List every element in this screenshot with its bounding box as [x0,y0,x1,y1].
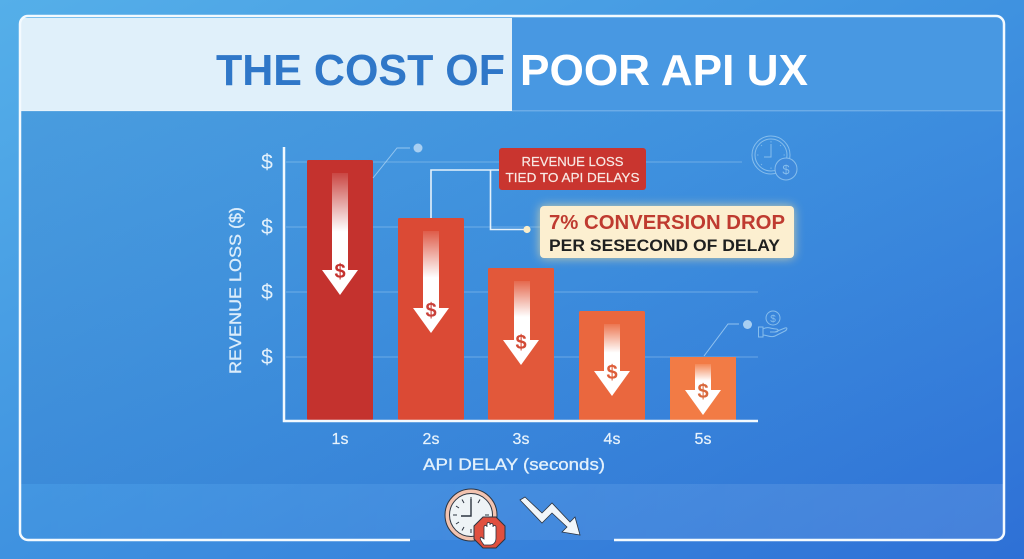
icon: hand with coin [758,311,787,337]
chart zone background [21,111,1003,484]
bar 4s: $ [606,362,618,384]
title banner [21,18,1003,112]
axes [284,147,758,421]
y axis tick labels: $ [261,281,273,304]
callout: conversion drop: PER SESECOND OF DELAY [549,236,781,255]
y axis tick labels: $ [261,346,273,369]
bar 1s: $ [334,261,346,283]
x axis tick labels: 1s [332,431,348,448]
bar 1s [307,160,373,420]
bar 3s [488,268,554,420]
y axis tick labels: $ [261,151,273,174]
bar 2s [398,218,464,420]
icon: clock with stop hand [445,489,505,548]
icon: clock with dollar [752,136,797,180]
grid lines [286,162,758,357]
icon: falling arrow [520,497,580,535]
bar 5s [670,357,736,420]
bar 5s: $ [697,381,709,403]
x axis title: API DELAY (seconds) [423,456,605,474]
annotation bar 1 [373,144,422,178]
x axis tick labels: 3s [513,431,529,448]
stop sign [474,517,505,548]
callout: revenue loss [499,148,646,190]
bar 3s: $ [515,332,527,354]
title: dark part: THE COST OF [216,46,505,95]
callout: revenue loss: TIED TO API DELAYS [506,170,640,185]
y axis tick labels: $ [261,216,273,239]
x axis tick labels: 5s [695,431,711,448]
callout: conversion drop: 7% CONVERSION DROP [549,212,785,234]
annotation bar 5 [704,320,752,356]
bar chart [227,147,758,474]
title: light part: POOR API UX [520,46,808,95]
callout: conversion drop [540,206,794,258]
connector lines [431,170,524,230]
hand [480,522,496,545]
x axis tick labels: 4s [604,431,620,448]
bar 2s: $ [425,300,437,322]
lower band [21,484,1003,540]
connector dot [523,226,531,233]
bar 4s [579,311,645,420]
icon: hand with coin: $ [770,314,776,325]
x axis tick labels: 2s [423,431,439,448]
x axis tick labels [332,431,711,448]
y axis tick labels [261,151,273,369]
callout: revenue loss: REVENUE LOSS [522,154,624,169]
y axis title: REVENUE LOSS ($) [227,207,245,374]
icon: clock with dollar: $ [782,162,790,177]
